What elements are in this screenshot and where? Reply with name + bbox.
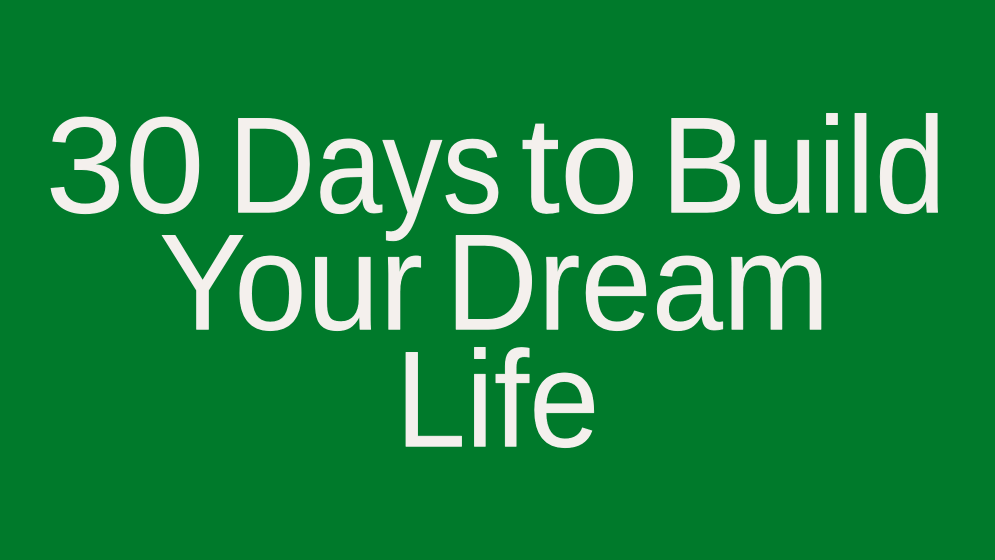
title: Life <box>396 324 600 476</box>
title: Build <box>661 90 946 242</box>
title: Days <box>228 90 502 242</box>
title: 30 <box>46 90 204 242</box>
title: to <box>521 90 639 242</box>
title: Dream <box>446 206 830 360</box>
title <box>46 90 946 476</box>
title: Your <box>159 206 423 360</box>
